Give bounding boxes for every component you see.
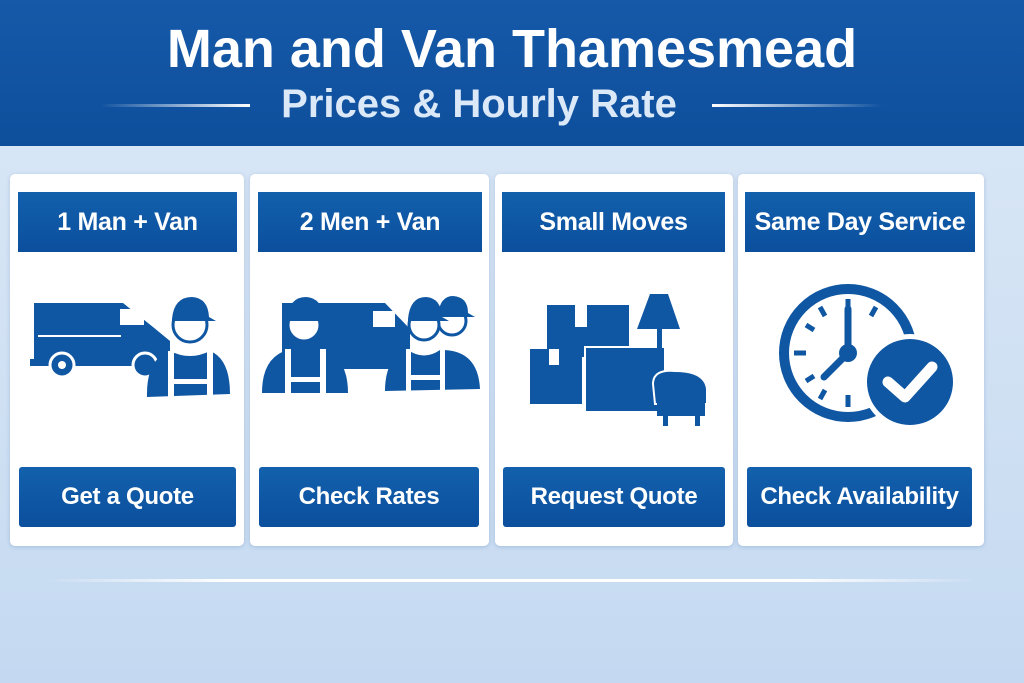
heading (745, 192, 975, 252)
icon: clock with check (779, 284, 953, 425)
panel: 2 Men + Van (250, 174, 489, 546)
button (259, 467, 479, 527)
heading (502, 192, 725, 252)
button: Check Availability (760, 483, 959, 510)
heading: 1 Man + Van (57, 208, 198, 236)
panel: 1 Man + Van (10, 174, 244, 546)
heading (18, 192, 237, 252)
button (19, 467, 236, 527)
button: Request Quote (531, 483, 697, 510)
title: Man and Van Thamesmead (167, 19, 857, 79)
heading (258, 192, 482, 252)
panel: Same Day Service (738, 174, 984, 546)
heading: Same Day Service (755, 208, 965, 236)
icon: van and man (30, 297, 230, 397)
button (747, 467, 972, 527)
heading: Small Moves (539, 208, 688, 236)
button: Check Rates (299, 483, 439, 510)
subtitle: Prices & Hourly Rate (281, 82, 677, 126)
icon: van and two men (262, 296, 480, 393)
panel: Small Moves (495, 174, 733, 546)
button: Get a Quote (61, 483, 194, 510)
button (503, 467, 725, 527)
icon: boxes, lamp, armchair (530, 294, 706, 426)
header band (0, 0, 1024, 146)
heading: 2 Men + Van (300, 208, 440, 236)
